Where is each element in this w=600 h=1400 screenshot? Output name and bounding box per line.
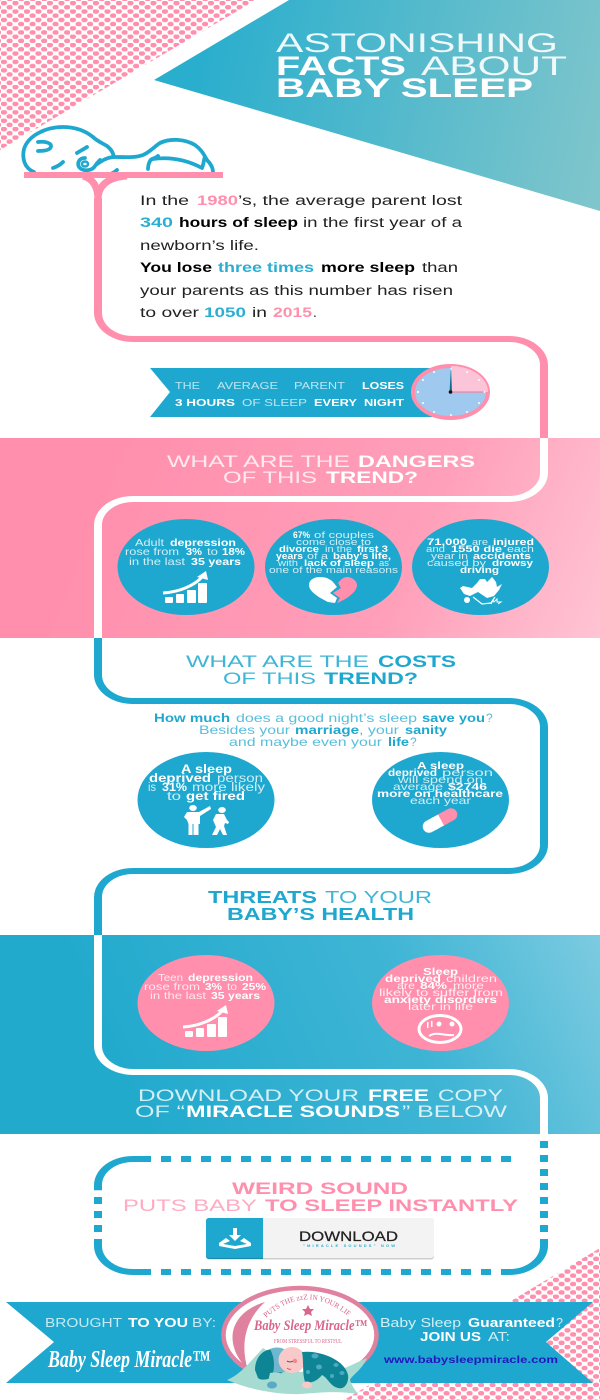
heading: dangers: WHAT ARE THE <box>167 453 350 471</box>
heading: costs: TREND? <box>324 670 418 688</box>
intro paragraph: more sleep <box>321 260 415 275</box>
intro paragraph: than <box>422 260 458 275</box>
costs intro text: ? <box>410 735 417 749</box>
circle: fired: to <box>167 791 181 803</box>
circle: divorce: divorce <box>279 544 319 554</box>
intro paragraph: . <box>313 305 317 320</box>
icon: sleeping baby <box>23 127 213 175</box>
heading: costs: OF THIS <box>223 670 316 688</box>
dashed download frame <box>98 1141 544 1272</box>
intro paragraph: three times <box>218 260 314 275</box>
costs intro text: ? <box>486 711 493 725</box>
footer left text: BY: <box>192 1315 216 1330</box>
circle: drowsy driving: accidents <box>473 551 531 561</box>
circle: healthcare: more on healthcare <box>377 788 503 800</box>
ribbon: three hours lost <box>150 366 488 418</box>
ribbon text: LOSES <box>362 380 404 392</box>
heading: dangers: DANGERS <box>358 453 475 471</box>
footer left text: BROUGHT <box>45 1315 122 1330</box>
circle: healthcare: average <box>393 781 443 793</box>
circle: adult depression: depression <box>170 537 236 549</box>
icon: rising chart <box>183 1005 228 1037</box>
circle: healthcare: deprived <box>388 767 437 779</box>
circle: drowsy driving: driving <box>460 565 499 575</box>
icon: clock <box>413 366 488 418</box>
intro paragraph: in the first year of a <box>303 215 463 230</box>
circle: adult depression: rose from <box>125 546 179 558</box>
circle: teen depression: to <box>227 981 237 993</box>
icon: boss firing employee <box>184 805 229 835</box>
footer ribbon <box>6 1302 593 1383</box>
dotted pattern: top left <box>0 0 256 150</box>
footer left text: TO YOU <box>128 1315 188 1330</box>
heading: dangers: OF THIS <box>223 469 317 487</box>
costs intro text: sanity <box>405 723 447 737</box>
connector line: white, threats section <box>98 935 544 1134</box>
costs intro text: save you <box>422 711 485 725</box>
circle: drowsy driving: drowsy <box>492 558 534 568</box>
costs intro text: life <box>388 735 409 749</box>
intro paragraph: to over <box>140 305 200 320</box>
circle: anxiety: more <box>453 980 484 992</box>
heading: weird sound: PUTS BABY <box>123 1197 257 1215</box>
circle: healthcare: person <box>442 767 493 779</box>
circle: divorce <box>265 519 402 615</box>
ribbon text: THE <box>175 380 200 392</box>
icon: broken heart <box>309 577 357 603</box>
circle: anxiety: are <box>397 980 415 992</box>
title text: FACTS <box>276 51 406 81</box>
circle: anxiety: later in life <box>408 1001 473 1013</box>
circle: fired: get fired <box>186 791 245 803</box>
footer right text <box>380 1316 563 1366</box>
icon: rising chart <box>163 571 208 603</box>
circle: teen depression: rose from <box>144 981 200 993</box>
heading: dangers: TREND? <box>326 469 418 487</box>
footer right text: JOIN US <box>420 1330 481 1344</box>
circle: teen depression: depression <box>188 972 253 984</box>
heading: costs <box>186 653 456 688</box>
circle: divorce: 67% <box>293 530 310 540</box>
ribbon text: OF SLEEP <box>242 397 307 409</box>
title text: ABOUT <box>421 51 567 81</box>
circle: healthcare: each year <box>410 795 472 807</box>
circle: drowsy driving: each <box>507 544 534 554</box>
intro paragraph: 2015 <box>273 305 313 320</box>
circle: adult depression: to <box>207 546 218 558</box>
intro paragraph: newborn’s life. <box>140 238 259 253</box>
intro paragraph: your parents as this number has risen <box>140 283 453 298</box>
circle: fired: is <box>148 782 156 794</box>
circle: fired: deprived <box>149 773 211 785</box>
footer right text: www.babysleepmiracle.com <box>383 1355 558 1366</box>
heading: weird sound: WEIRD SOUND <box>232 1180 408 1198</box>
circle: healthcare: $2746 <box>448 781 487 793</box>
pink band: dangers background <box>0 438 600 638</box>
intro paragraph: hours of sleep <box>179 215 298 230</box>
circle: drowsy driving: 71,000 <box>427 537 467 547</box>
intro paragraph: in <box>252 305 267 320</box>
costs intro text: , your <box>359 723 399 737</box>
intro paragraph: 1050 <box>204 305 246 320</box>
intro paragraph: In the <box>140 193 189 208</box>
icon: sad face <box>419 1016 461 1042</box>
ribbon text: PARENT <box>294 380 346 392</box>
logo tagline arc: PUTS THE zzZ IN YOUR LIFE <box>263 1294 352 1318</box>
circle: drowsy driving: caused by <box>427 558 487 568</box>
circle: adult depression: Adult <box>135 537 164 549</box>
intro paragraph: 1980 <box>197 193 238 208</box>
ribbon text: EVERY <box>314 397 357 409</box>
heading: weird sound <box>123 1180 518 1215</box>
call to action: miracle sounds: FREE <box>368 1087 429 1105</box>
circle: healthcare: will spend on <box>397 774 483 786</box>
circle: divorce: with <box>277 558 298 568</box>
circle: adult depression: 35 years <box>191 556 241 568</box>
circle: teen depression: in the last <box>150 990 206 1002</box>
connector line: blue, costs section <box>98 638 544 935</box>
connector line: white, dangers section <box>98 438 544 638</box>
title text: BABY SLEEP <box>276 73 533 103</box>
footer right text: AT: <box>488 1330 510 1344</box>
circle: teen depression: 35 years <box>211 990 260 1002</box>
circle: drowsy driving: year in <box>431 551 468 561</box>
costs intro text: Besides your <box>199 723 290 737</box>
call to action: miracle sounds: ” BELOW <box>402 1103 508 1121</box>
circle: drowsy driving: and <box>426 544 445 554</box>
download button: DOWNLOAD <box>299 1228 398 1244</box>
heading: costs: WHAT ARE THE <box>186 653 369 671</box>
circle: teen depression: 25% <box>242 981 267 993</box>
footer right text: Guaranteed <box>468 1316 555 1330</box>
circle: divorce: of couples <box>314 530 375 540</box>
ribbon text <box>175 380 405 409</box>
call to action: miracle sounds: OF “ <box>135 1103 185 1121</box>
intro paragraph <box>140 193 463 320</box>
call to action: miracle sounds: MIRACLE SOUNDS <box>186 1103 400 1121</box>
download button <box>206 1218 434 1260</box>
call to action: miracle sounds: COPY <box>438 1087 503 1105</box>
circle: divorce: lack of sleep <box>304 558 374 568</box>
blue band: threats background <box>0 935 600 1134</box>
circle: drowsy driving: are <box>472 537 488 547</box>
circle: anxiety <box>372 955 509 1051</box>
logo badge: Baby Sleep Miracle™ <box>253 1318 367 1334</box>
footer right text: Baby Sleep <box>380 1316 461 1330</box>
costs intro text: How much <box>154 711 230 725</box>
icon: baby on pillow <box>227 1347 367 1394</box>
heading: threats <box>208 887 432 924</box>
footer left text <box>45 1315 216 1373</box>
ribbon text: 3 HOURS <box>175 397 235 409</box>
circle: adult depression <box>118 519 254 615</box>
circle: teen depression: Teen <box>158 972 183 984</box>
heading: costs: COSTS <box>378 653 456 671</box>
circle: divorce: baby's life, <box>333 551 391 561</box>
dotted pattern: bottom right <box>344 1248 600 1400</box>
circle: fired: 31% <box>162 782 187 794</box>
ribbon text: NIGHT <box>364 397 405 409</box>
ribbon text: AVERAGE <box>217 380 278 392</box>
title text <box>276 28 567 103</box>
costs intro text: marriage <box>295 723 359 737</box>
costs intro text <box>154 711 493 749</box>
circle: divorce: first 3 <box>357 544 388 554</box>
heading: threats: TO YOUR <box>325 887 432 907</box>
connector line: pink, top section <box>24 172 544 438</box>
costs intro text: and maybe even your <box>229 735 382 749</box>
circle: fired: person <box>217 773 263 785</box>
circle: teen depression <box>138 955 274 1051</box>
circle: divorce: one of the main reasons <box>269 565 399 575</box>
icon: overturned car <box>460 577 502 604</box>
circle: teen depression: 3% <box>205 981 223 993</box>
circle: fired: A sleep <box>181 764 232 776</box>
heading: weird sound: TO SLEEP INSTANTLY <box>265 1197 518 1215</box>
circle: divorce: years <box>276 551 303 561</box>
circle: healthcare: A sleep <box>417 760 464 772</box>
circle: anxiety: Sleep <box>423 966 458 978</box>
circle: drowsy driving <box>412 519 549 615</box>
intro paragraph: ’s, the average parent lost <box>238 193 462 208</box>
logo badge <box>221 1286 379 1394</box>
logo badge: FROM STRESSFUL TO RESTFUL <box>274 1339 342 1345</box>
heading: threats: THREATS <box>208 887 317 907</box>
circle: divorce: in the <box>325 544 352 554</box>
icon: pill <box>429 814 451 826</box>
circle: anxiety: children <box>446 973 497 985</box>
circle: fired: more likely <box>192 782 265 794</box>
title banner <box>154 0 600 211</box>
circle: fired <box>138 752 274 848</box>
circle: drowsy driving: 1550 die <box>451 544 502 554</box>
download button: "MIRACLE SOUNDS" NOW <box>303 1243 395 1248</box>
circle: divorce: come close to <box>296 537 371 547</box>
circle: healthcare <box>372 752 509 848</box>
footer left text: Baby Sleep Miracle™ <box>47 1347 210 1373</box>
heading: threats: BABY’S HEALTH <box>227 904 414 924</box>
circle: adult depression: 18% <box>222 546 246 558</box>
intro paragraph: You lose <box>140 260 213 275</box>
intro paragraph: 340 <box>140 215 173 230</box>
circle: anxiety: likely to suffer from <box>379 987 503 999</box>
call to action: miracle sounds: DOWNLOAD YOUR <box>138 1087 359 1105</box>
icon: download <box>219 1228 251 1249</box>
title text: ASTONISHING <box>276 28 558 58</box>
circle: adult depression: 3% <box>186 546 203 558</box>
circle: adult depression: in the last <box>129 556 185 568</box>
circle: anxiety: deprived <box>385 973 441 985</box>
circle: drowsy driving: injured <box>493 537 534 547</box>
circle: divorce: as <box>379 558 389 568</box>
call to action: miracle sounds <box>135 1087 508 1121</box>
footer right text: ? <box>556 1316 563 1330</box>
circle: anxiety: 84% <box>420 980 448 992</box>
circle: anxiety: anxiety disorders <box>384 994 497 1006</box>
circle: divorce: of a <box>307 551 329 561</box>
heading: dangers <box>167 453 475 487</box>
costs intro text: does a good night’s sleep <box>236 711 417 725</box>
